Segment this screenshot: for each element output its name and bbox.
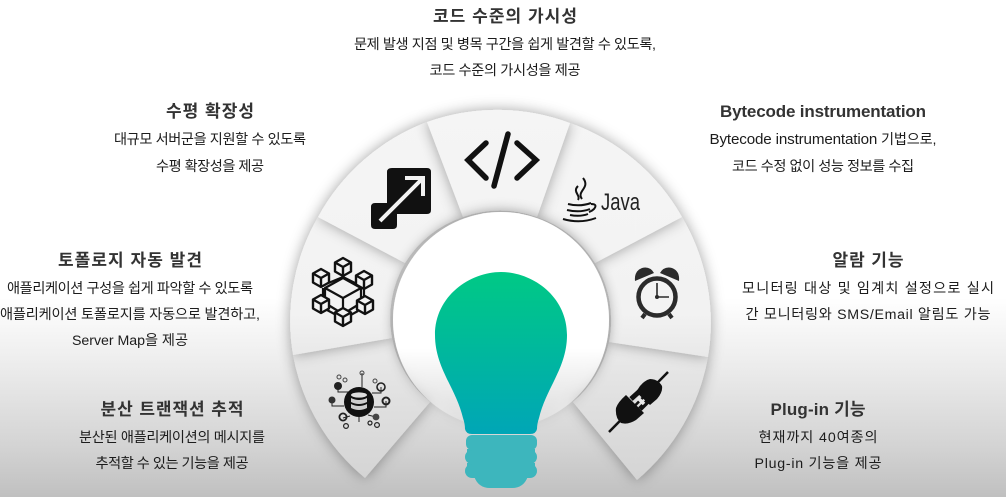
icon: database network (328, 371, 390, 428)
bulb glass (435, 272, 567, 434)
description: 애플리케이션 구성을 쉽게 파악할 수 있도록 (7, 281, 253, 297)
description: Bytecode instrumentation 기법으로, (710, 131, 936, 148)
heading: 수평 확장성 (166, 102, 254, 121)
description: 현재까지 40여종의 (758, 430, 878, 446)
heading: Bytecode instrumentation (720, 102, 926, 121)
segment: horizontal scale (318, 122, 463, 263)
text block: topology (0, 251, 260, 349)
segment: topology (290, 217, 405, 355)
icon: network of cubes (313, 258, 373, 326)
heading: 코드 수준의 가시성 (433, 7, 577, 26)
description: 대규모 서버군을 지원할 수 있도록 (114, 132, 306, 148)
text block: topology: 애플리케이션 토폴로지를 자동으로 발견하고, (0, 307, 260, 323)
text block: plug-in (754, 400, 882, 472)
text block: distributed tracing: 추적할 수 있는 기능을 제공 (96, 456, 248, 472)
text block: bytecode (710, 102, 936, 175)
segment: plug-in (573, 342, 708, 480)
segment: alarm (595, 217, 711, 357)
text block: bytecode: 코드 수정 없이 성능 정보를 수집 (732, 159, 914, 175)
segment: code visibility (427, 110, 570, 217)
heading: 알람 기능 (832, 250, 904, 270)
center disc (393, 212, 609, 428)
segment: distributed tracing (293, 338, 430, 478)
text block: code visibility: 코드 수준의 가시성을 제공 (430, 63, 580, 79)
text block: alarm: 간 모니터링와 SMS/Email 알림도 가능 (746, 307, 990, 323)
description: 모니터링 대상 및 임계치 설정으로 실시 (742, 281, 994, 297)
icon: code brackets (468, 134, 536, 186)
text block: horizontal scale: 수평 확장성을 제공 (156, 159, 264, 175)
icon: plug (609, 372, 668, 432)
heading: 분산 트랜잭션 추적 (100, 400, 244, 419)
text block: alarm (742, 250, 994, 323)
text block: distributed tracing (79, 400, 265, 472)
icon: java logo (563, 178, 640, 221)
icon: expand arrow (371, 168, 431, 229)
heading: Plug-in 기능 (770, 400, 866, 419)
heading: 토폴로지 자동 발견 (58, 251, 202, 270)
text block: horizontal scale (114, 102, 306, 175)
text block: plug-in: Plug-in 기능을 제공 (754, 456, 882, 472)
bulb base (465, 435, 537, 488)
lightbulb (435, 272, 567, 488)
description: 문제 발생 지점 및 병목 구간을 쉽게 발견할 수 있도록, (354, 37, 656, 53)
description: 분산된 애플리케이션의 메시지를 (79, 430, 265, 446)
text block: topology: Server Map을 제공 (72, 333, 188, 349)
segment: java bytecode (537, 123, 682, 263)
radial diagram (290, 110, 711, 488)
text block: code visibility (354, 7, 656, 79)
icon: alarm clock (635, 268, 679, 318)
java wordmark: Java (601, 189, 640, 216)
